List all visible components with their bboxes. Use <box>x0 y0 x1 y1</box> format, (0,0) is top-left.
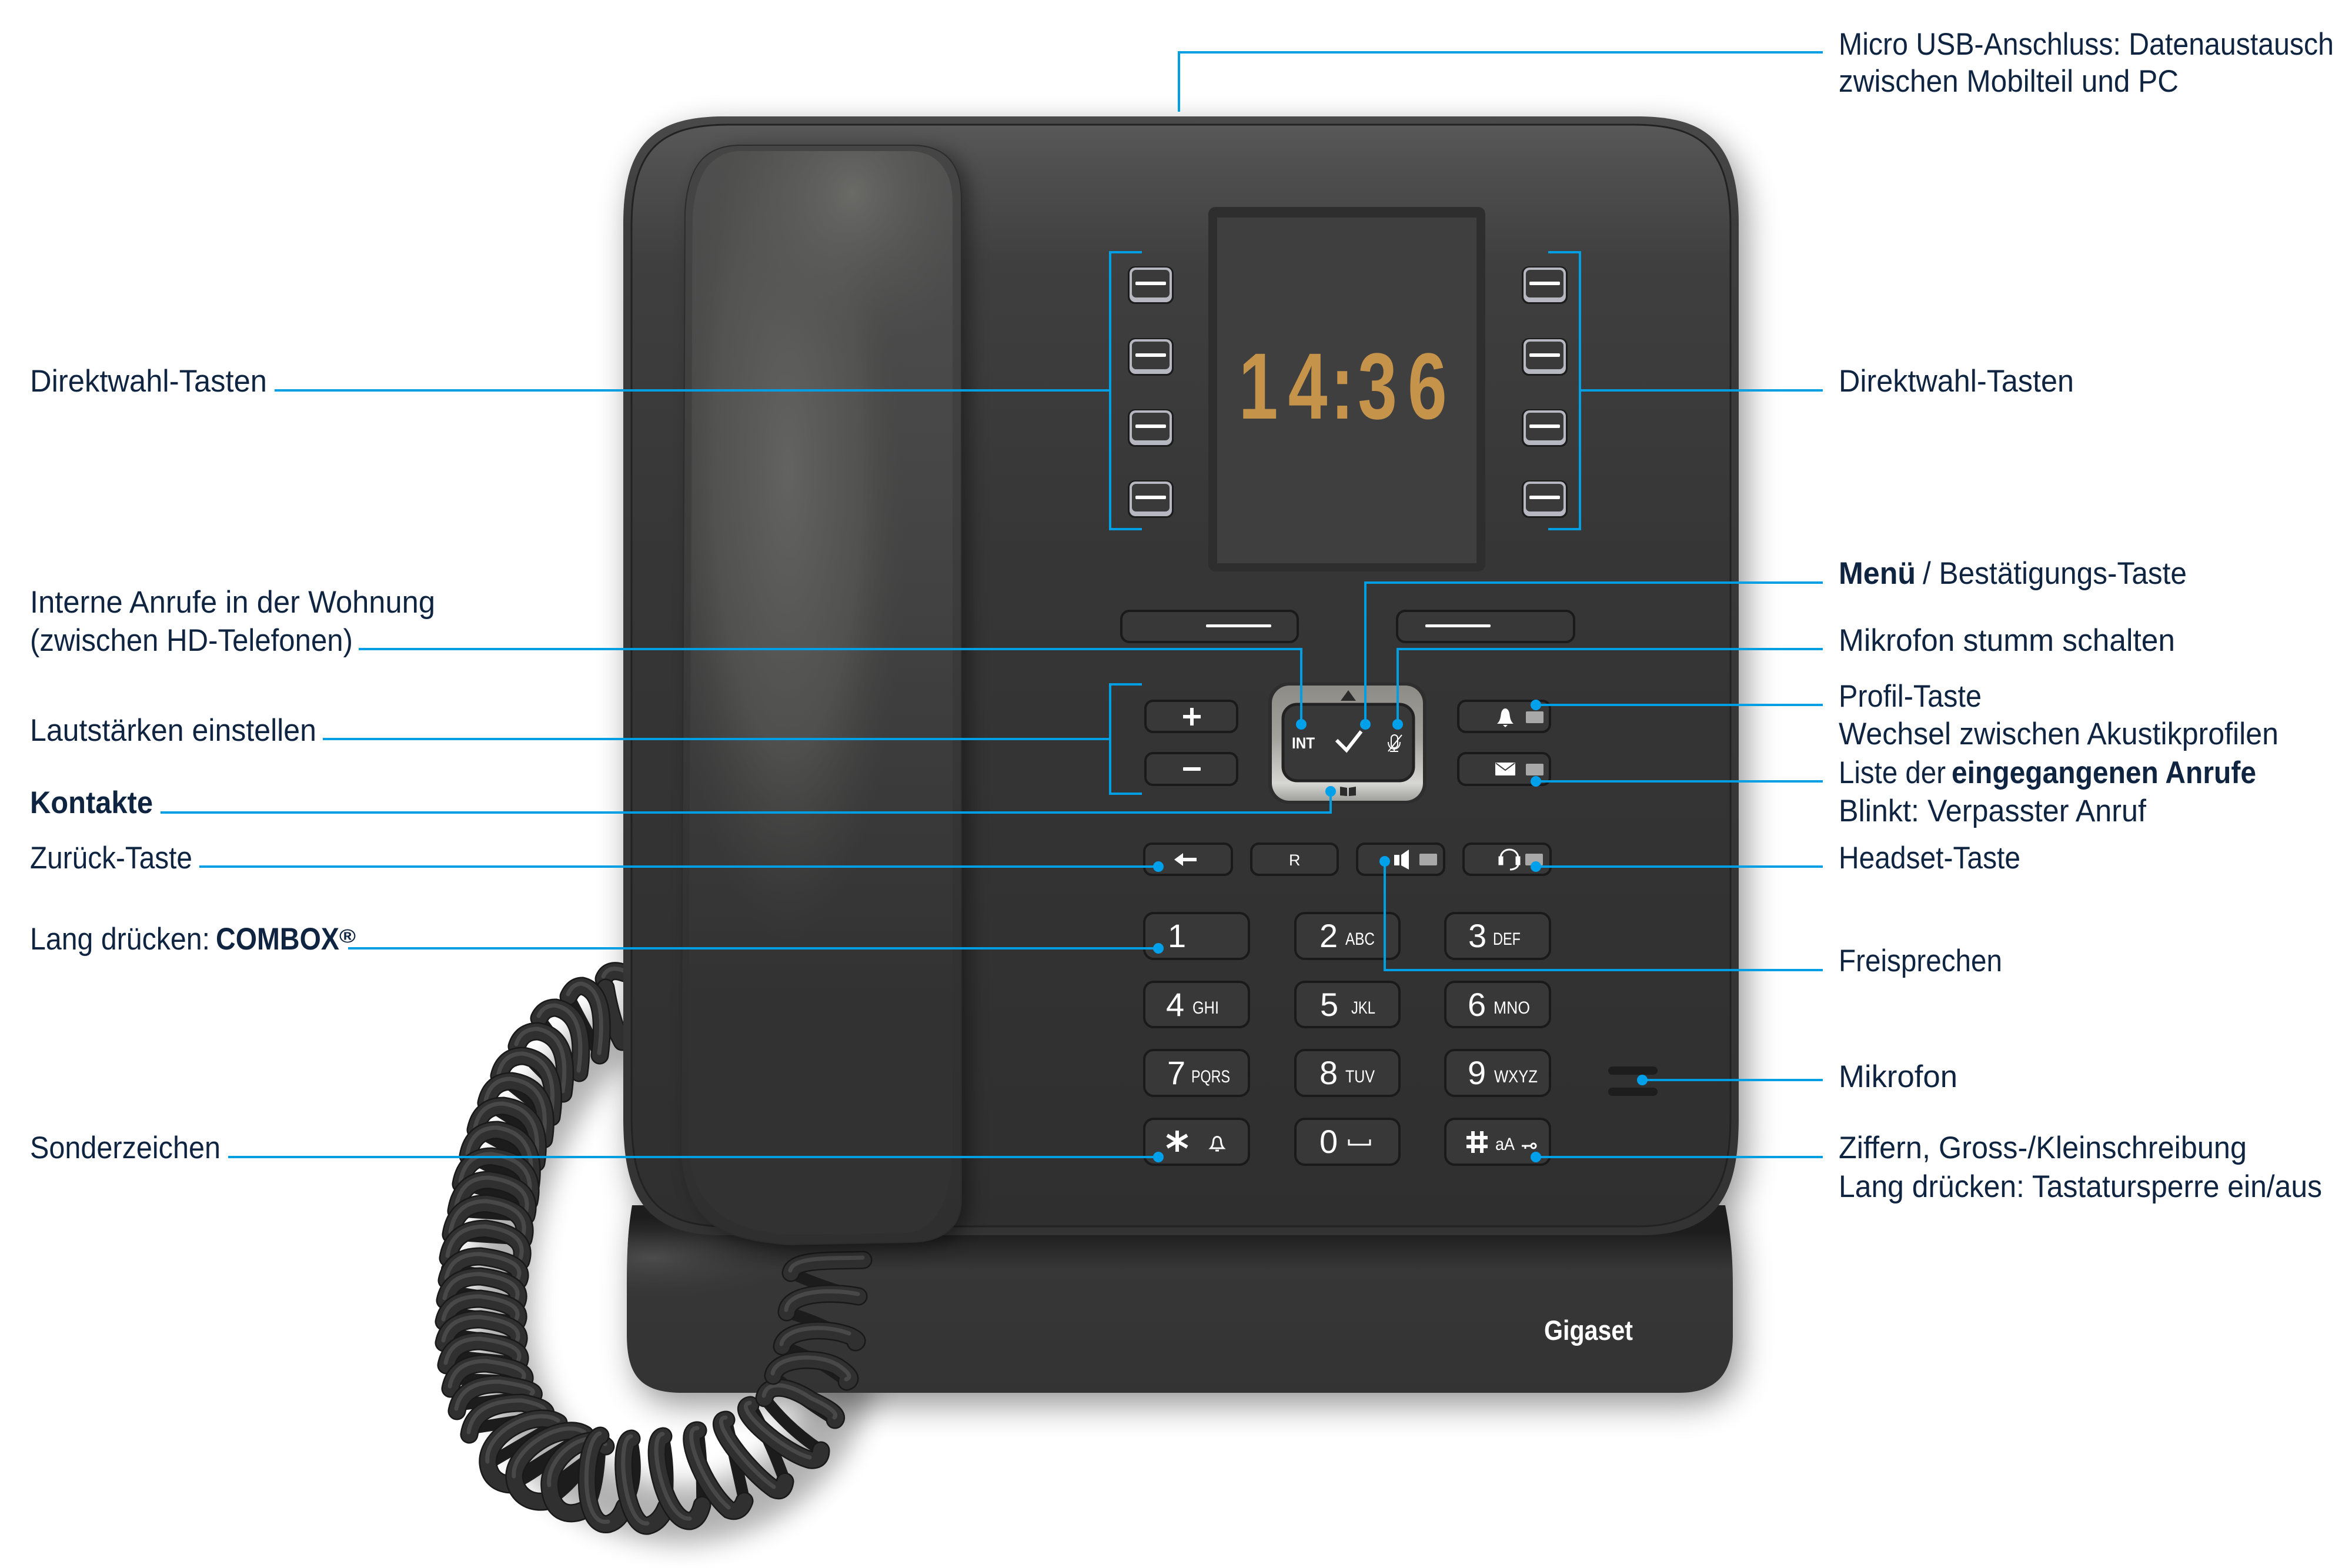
phone body <box>623 116 1739 1235</box>
keypad: 5 <box>1320 986 1338 1023</box>
callout: COMBOX: Lang drücken: <box>30 922 210 957</box>
icon: bell <box>1497 708 1514 727</box>
callout: Zurück-Taste: Zurück-Taste <box>30 841 192 875</box>
logo: Gigaset: Gigaset <box>1544 1315 1633 1346</box>
icon: contacts book <box>1340 787 1356 796</box>
callout: Direktwahl-Tasten left: Direktwahl-Tasten <box>30 364 267 399</box>
coiled handset cord <box>443 969 863 1526</box>
speed dial keys left <box>1128 266 1174 518</box>
callout: Profil-Taste: Wechsel zwischen Akustikprofilen <box>1839 717 2278 751</box>
icon: back arrow <box>1174 853 1197 866</box>
keypad: 8 <box>1319 1054 1338 1091</box>
icon: star key <box>1167 1131 1187 1152</box>
call keys row <box>1144 844 1551 875</box>
keypad: GHI <box>1192 998 1219 1018</box>
keypad <box>1144 913 1550 1165</box>
callout: Mikrofon: Mikrofon <box>1839 1059 1957 1094</box>
callout: Sonderzeichen <box>30 1131 1164 1165</box>
keypad: 9 <box>1468 1054 1486 1091</box>
handset <box>681 145 961 1245</box>
callout: Freisprechen <box>1379 856 2002 978</box>
clock time: 14:36 <box>1239 333 1447 439</box>
navigation key <box>1268 683 1426 804</box>
callout: Menü <box>1360 556 2187 730</box>
callout: Lautstärken einstellen <box>30 684 1142 794</box>
phone drop shadow <box>630 128 1746 1405</box>
keypad: 2 <box>1319 917 1338 954</box>
callout: Interne Anrufe: Interne Anrufe in der Wohnung <box>30 585 435 620</box>
callout: eingegangene Anrufe: Blinkt: Verpasster Anruf <box>1839 794 2146 828</box>
callout: Mikrofon stumm <box>1392 623 2175 730</box>
keypad: 1 <box>1168 917 1186 954</box>
keypad: JKL <box>1351 998 1375 1018</box>
icon: key <box>1522 1144 1536 1149</box>
icon: space bracket <box>1349 1139 1370 1145</box>
callout: eingegangene Anrufe <box>1531 755 2256 828</box>
keypad: 3 <box>1468 917 1486 954</box>
icon: check mark <box>1337 731 1361 750</box>
speed dial keys right <box>1522 266 1568 518</box>
callout: Ziffern: Lang drücken: Tastatursperre ein/aus <box>1839 1169 2322 1204</box>
icon: headset <box>1499 850 1519 870</box>
callout: eingegangene Anrufe: eingegangenen Anrufe <box>1952 755 2256 790</box>
R label: R <box>1289 851 1301 869</box>
keypad: DEF <box>1493 930 1521 949</box>
callout: COMBOX <box>30 922 1164 957</box>
callout: Mikrofon <box>1637 1059 1957 1094</box>
callout: Direktwahl-Tasten right: Direktwahl-Tasten <box>1839 364 2074 399</box>
icon: speaker <box>1394 850 1409 870</box>
icon: up triangle <box>1341 690 1356 701</box>
callout: Menü: Menü <box>1839 556 1916 591</box>
callout: Kontakte <box>30 785 1336 820</box>
callout: Interne Anrufe <box>30 585 1307 730</box>
callout: eingegangene Anrufe: Liste der <box>1839 755 1946 790</box>
callout: Direktwahl-Tasten left <box>30 252 1142 529</box>
callout: Ziffern <box>1531 1131 2322 1204</box>
callout: Kontakte: Kontakte <box>30 785 153 820</box>
callout: Sonderzeichen: Sonderzeichen <box>30 1131 220 1165</box>
volume keys <box>1145 701 1237 785</box>
callout: Freisprechen: Freisprechen <box>1839 944 2002 978</box>
callout: Micro USB: zwischen Mobilteil und PC <box>1839 64 2179 99</box>
callout: Zurück-Taste <box>30 841 1164 875</box>
icon: muted microphone <box>1388 735 1402 751</box>
keypad: 7 <box>1167 1054 1185 1091</box>
callout: Direktwahl-Tasten right <box>1548 252 2074 529</box>
INT label: INT <box>1292 734 1315 752</box>
icon: envelope <box>1495 763 1515 775</box>
callout: Menü: / Bestätigungs-Taste <box>1923 556 2187 591</box>
keypad: WXYZ <box>1494 1067 1538 1086</box>
callout: Profil-Taste <box>1531 679 2278 751</box>
keypad: 4 <box>1166 986 1184 1023</box>
callout: COMBOX: COMBOX <box>216 922 339 957</box>
keypad: PQRS <box>1191 1067 1230 1086</box>
handset shadow <box>689 149 970 1248</box>
keypad: aA <box>1495 1135 1515 1154</box>
callout: Micro USB <box>1179 27 2334 112</box>
callout: Profil-Taste: Profil-Taste <box>1839 679 1982 714</box>
keypad: 6 <box>1468 986 1486 1023</box>
microphone grille <box>1608 1066 1658 1096</box>
callout: Interne Anrufe: (zwischen HD-Telefonen) <box>30 623 353 658</box>
callout: Headset-Taste <box>1531 841 2020 875</box>
callout: Headset-Taste: Headset-Taste <box>1839 841 2020 875</box>
icon: ringer bell outline <box>1211 1137 1224 1151</box>
callout: Lautstärken einstellen: Lautstärken einstellen <box>30 713 316 748</box>
cord drop shadow <box>502 1027 849 1514</box>
icon: hash key <box>1466 1131 1488 1153</box>
display <box>1208 207 1485 571</box>
callout: Ziffern: Ziffern, Gross-/Kleinschreibung <box>1839 1131 2247 1165</box>
base stand <box>627 1205 1733 1393</box>
keypad: TUV <box>1345 1067 1375 1086</box>
keypad: MNO <box>1494 998 1530 1018</box>
keypad: ABC <box>1345 930 1375 949</box>
callout: Mikrofon stumm: Mikrofon stumm schalten <box>1839 623 2175 658</box>
soft keys <box>1121 611 1574 642</box>
keypad: 0 <box>1319 1123 1338 1160</box>
callout: COMBOX: ® <box>339 925 356 947</box>
function keys right <box>1458 701 1550 785</box>
